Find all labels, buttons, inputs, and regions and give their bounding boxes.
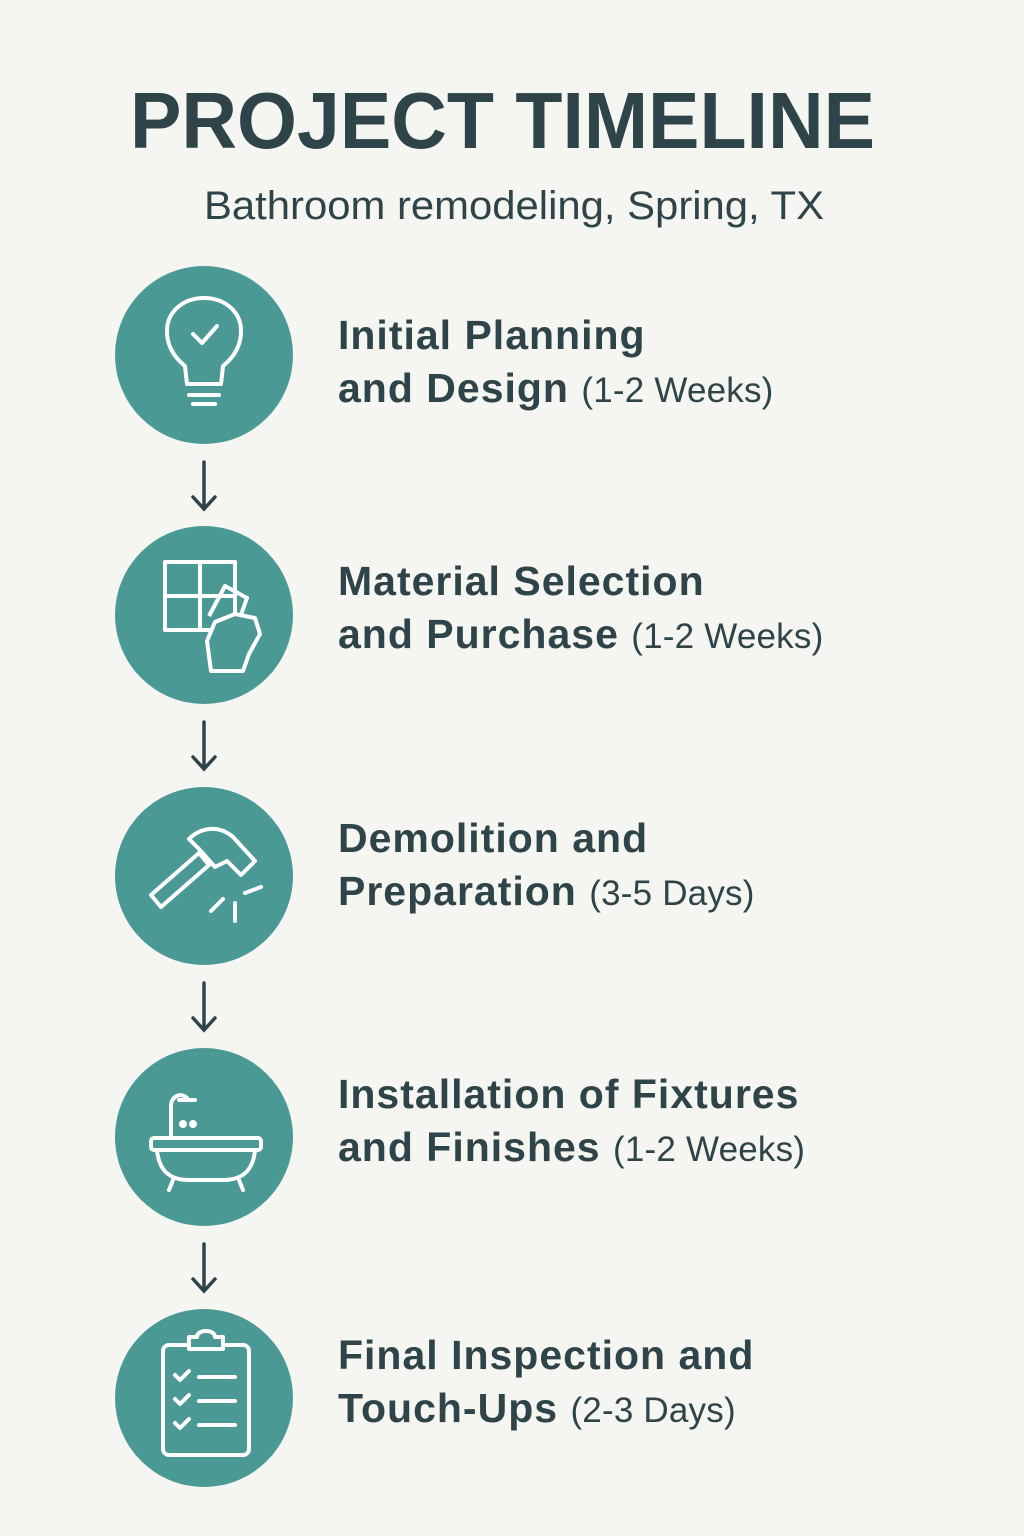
title: PROJECT TIMELINE [130,76,875,165]
title [130,76,875,228]
step 1 text: Initial Planning [338,312,646,358]
step 2 text: Material Selection [338,558,705,604]
arrow 4 [191,1242,217,1294]
step 4 text: Installation of Fixtures [338,1071,799,1117]
step 4 text: and Finishes (1-2 Weeks) [338,1124,805,1170]
icon: tiles and hand [115,526,293,704]
icon: clipboard checklist [115,1309,293,1487]
arrow 3 [191,981,217,1032]
step 5 text: Touch-Ups (2-3 Days) [338,1385,736,1431]
icon: bathtub [115,1048,293,1226]
step 3 text: Preparation (3-5 Days) [338,868,755,914]
step 3 text: Demolition and [338,815,648,861]
icon: hammer [115,787,293,965]
title: Bathroom remodeling, Spring, TX [204,184,824,228]
step 4 text [338,1071,805,1170]
step 3 text [338,815,755,914]
step 5 text: Final Inspection and [338,1332,754,1378]
icon: light bulb [115,266,293,444]
step 2 text: and Purchase (1-2 Weeks) [338,611,823,657]
arrow 1 [191,460,217,512]
arrow 2 [191,720,217,772]
step 5 text [338,1332,754,1431]
step 2 text [338,558,823,657]
step 1 text [338,312,774,411]
step 1 text: and Design (1-2 Weeks) [338,365,774,411]
